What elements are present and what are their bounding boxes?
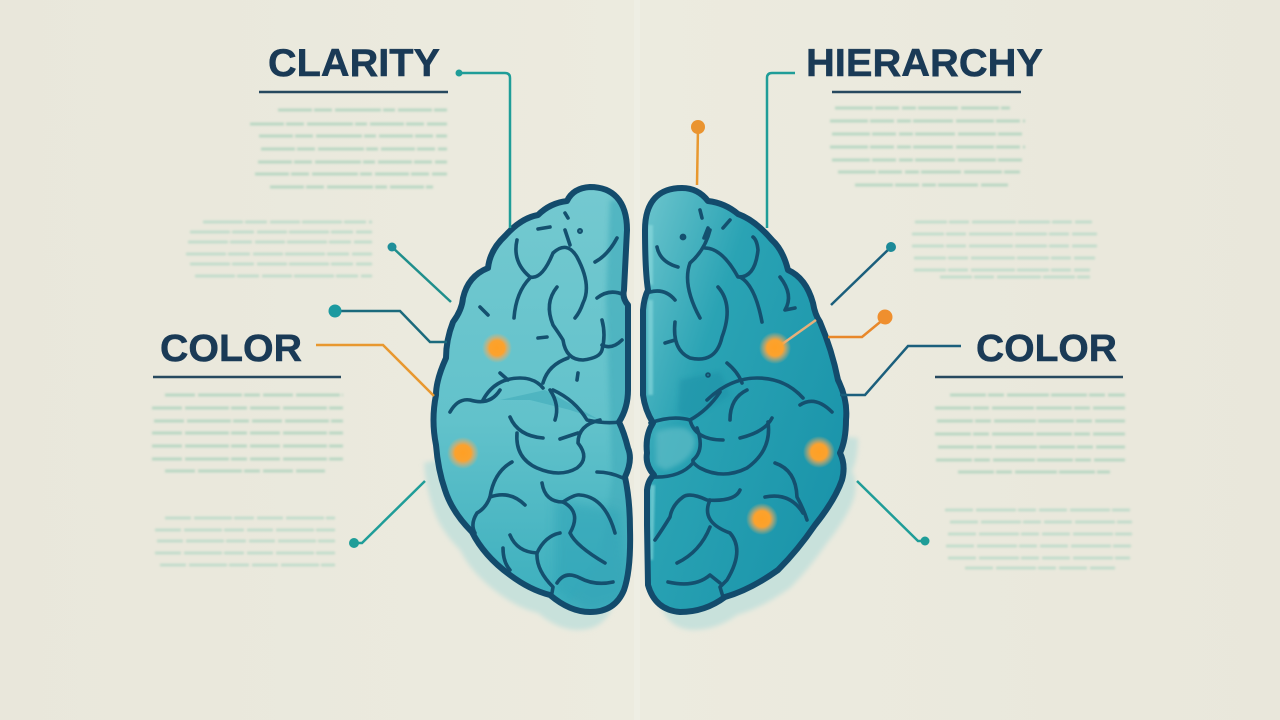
infographic canvas [151,48,1133,632]
connector: orange dot to edge [778,320,816,347]
connector: color left navy [328,304,447,342]
text block: right upper body (illegible greeked lines) [912,222,1097,277]
heading: color left: COLOR [160,328,302,370]
heading: color right: COLOR [976,328,1117,370]
text block: right lower body (illegible greeked lines) [945,510,1132,568]
left hemisphere outline [434,187,630,612]
orange glow markers [447,332,835,535]
text block: hierarchy body (illegible greeked lines) [830,108,1025,185]
right hemisphere outline [643,188,846,612]
left hemisphere folds [450,213,624,593]
connector: color left orange [316,345,434,396]
connector: right lower [857,481,930,546]
heading: hierarchy: HIERARCHY [806,42,1043,85]
right hemisphere folds [650,210,832,597]
connector: color right orange [828,310,892,337]
text block: left lower body (illegible greeked lines) [155,518,335,565]
connector: hierarchy [767,73,795,228]
right hemisphere shading [648,225,730,560]
brain: left hemisphere [434,187,634,615]
connector: left upper [388,242,451,302]
connector: color right navy [840,346,961,395]
text block: clarity body (illegible greeked lines) [250,110,447,187]
connector: left lower [349,481,425,548]
connector: top orange [691,120,705,185]
left hemisphere shading [500,200,634,615]
text block: color right body (illegible greeked lines) [935,395,1125,472]
connector: clarity [456,70,510,228]
text block: left upper body (illegible greeked lines) [186,222,372,276]
brain shadow [424,418,858,630]
brain: right hemisphere [643,188,846,612]
heading: clarity: CLARITY [268,42,440,85]
connector: right upper [831,242,896,305]
text block: color left body (illegible greeked lines) [152,395,343,471]
